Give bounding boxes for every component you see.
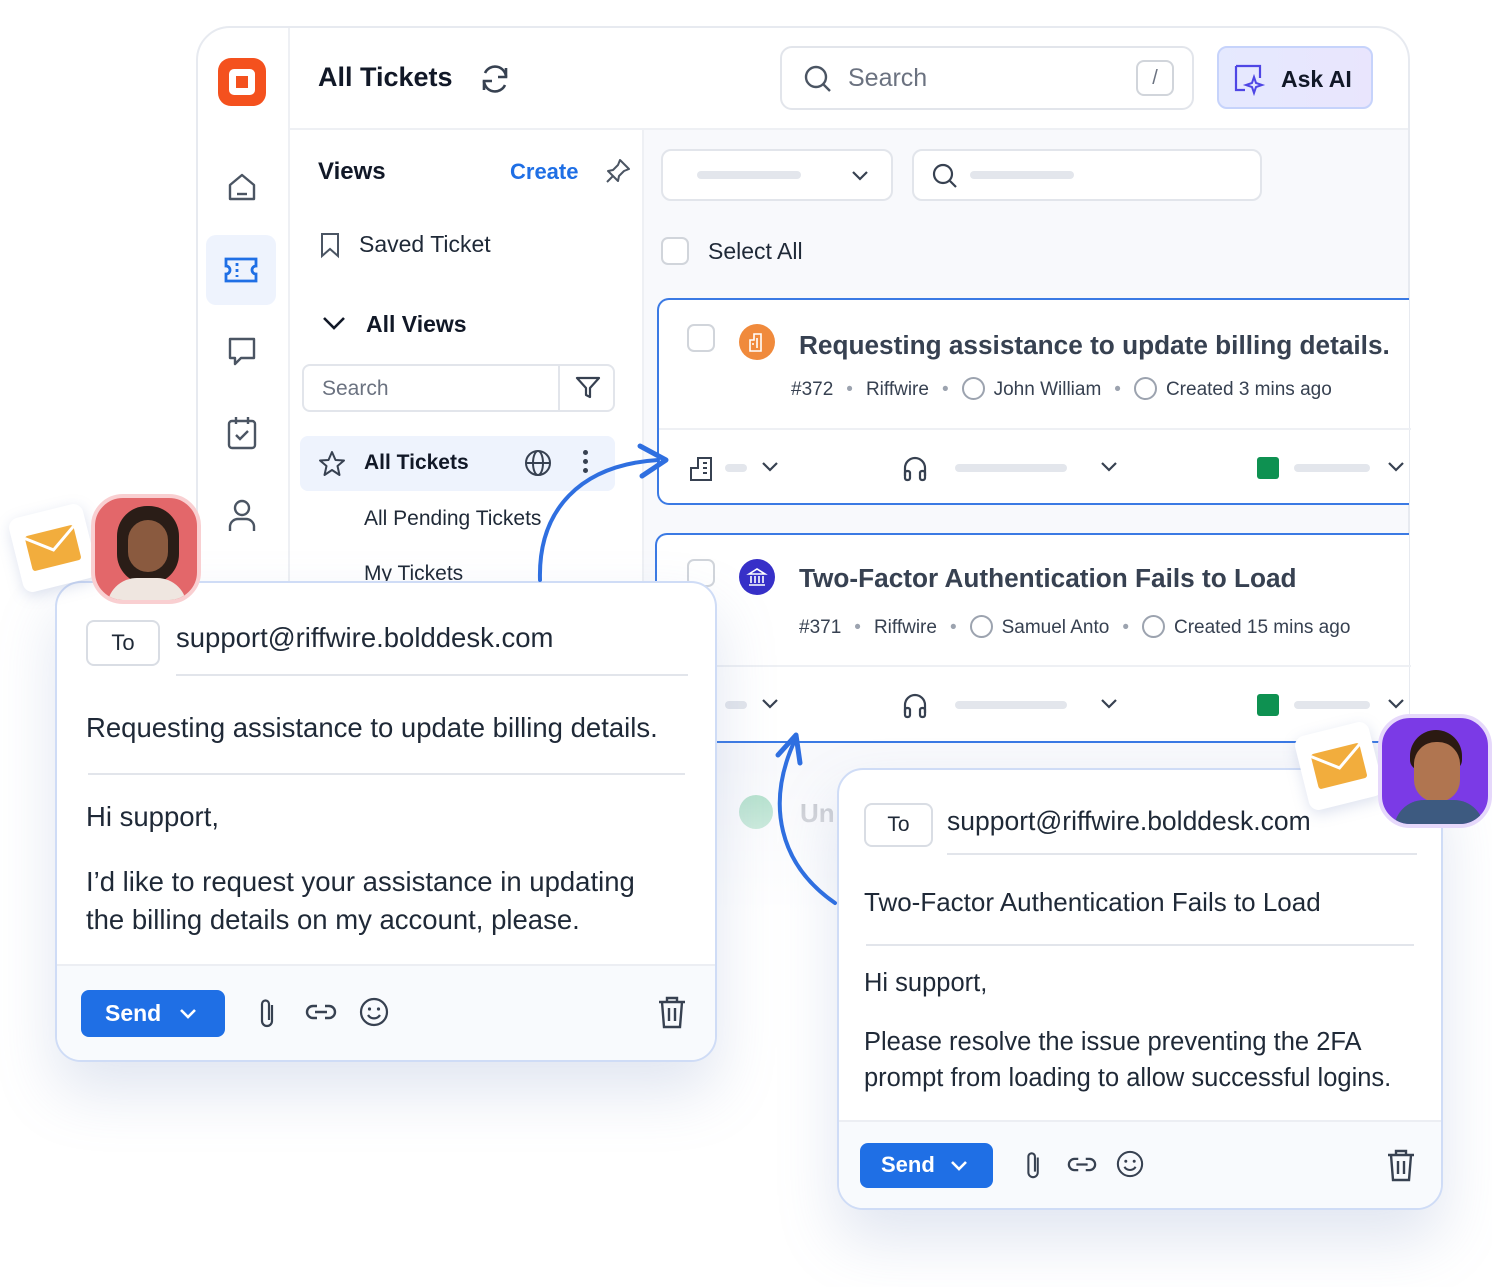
arrow: right email to ticket 371 [776,732,838,906]
saved ticket [321,233,339,258]
icon: calendar [228,417,256,450]
filter bar [661,149,1262,201]
faded third ticket [739,795,835,829]
header title [318,62,508,93]
icon: orange building [739,324,775,360]
search [912,149,1262,201]
right email composer: Please resolve the issue preventing the 2FA [864,1028,1362,1056]
faded third ticket: Un [800,798,835,828]
avatar: man [1378,714,1492,828]
left email composer: Hi support, [86,801,219,832]
views search [302,364,615,412]
icon: chat [228,338,256,366]
header search: Search [848,64,927,92]
arrow: left email to ticket 372 [538,444,668,582]
right email composer: Hi support, [864,969,987,997]
all tickets active [300,436,615,491]
sidebar divider [288,28,290,928]
composer footer: Send [105,1000,161,1026]
header divider [290,128,1412,130]
views column: Create [510,159,578,184]
Ask AI button: Ask AI [1281,66,1352,92]
views column: All Views [366,311,467,337]
ticket card 372: Requesting assistance to update billing details. [799,330,1390,360]
left email composer [55,581,717,1062]
select all [661,237,803,265]
left email composer: I’d like to request your assistance in updating [86,866,635,897]
select all: Select All [708,238,803,264]
header search [780,46,1194,110]
ticket card 371 [655,533,1409,743]
envelope tile right [1293,720,1385,812]
left email composer: the billing details on my account, please. [86,904,580,935]
icon: bank [739,559,775,595]
right email composer: Two-Factor Authentication Fails to Load [864,887,1321,917]
icon: pin [606,159,630,183]
all tickets active: All Tickets [364,451,469,474]
envelope tile left [7,502,99,594]
views search: Search [322,377,389,400]
ticket card 371: #371 • Riffwire • Samuel Anto • Created 15 mins ago [799,617,1350,638]
all views [323,317,345,330]
bottom fade of main panel [196,760,1412,930]
composer footer [839,1120,1445,1212]
right email composer: To [887,813,910,836]
composer footer [57,964,719,1064]
icon: refresh [482,65,508,93]
icon: user [228,500,256,531]
right email composer: prompt from loading to allow successful logins. [864,1064,1391,1092]
views column [300,158,630,585]
ticket card 371: Two-Factor Authentication Fails to Load [799,563,1297,593]
views column: Saved Ticket [359,231,491,257]
logo [218,58,266,106]
icon: home [228,174,256,200]
views column: All Pending Tickets [364,507,541,530]
avatar: woman [91,494,201,604]
ticket card 372: #372 • Riffwire • John William • Created 3 mins ago [791,379,1332,400]
header search: / [1152,67,1158,89]
right content area [642,130,1412,930]
sidebar icons [206,174,276,531]
Ask AI button [1217,46,1373,109]
right email composer [837,768,1443,1210]
dropdown [661,149,893,201]
views heading: Views [318,158,386,185]
header title: All Tickets [318,62,453,92]
ticket card 372 [657,298,1409,505]
right email composer: support@riffwire.bolddesk.com [947,806,1311,836]
main app panel [196,26,1410,926]
left email composer: support@riffwire.bolddesk.com [176,622,553,653]
left email composer: To [111,630,135,655]
views column: My Tickets [364,562,463,585]
composer footer: Send [881,1152,935,1177]
left email composer: Requesting assistance to update billing details. [86,712,658,743]
icon: tickets active [206,235,276,305]
